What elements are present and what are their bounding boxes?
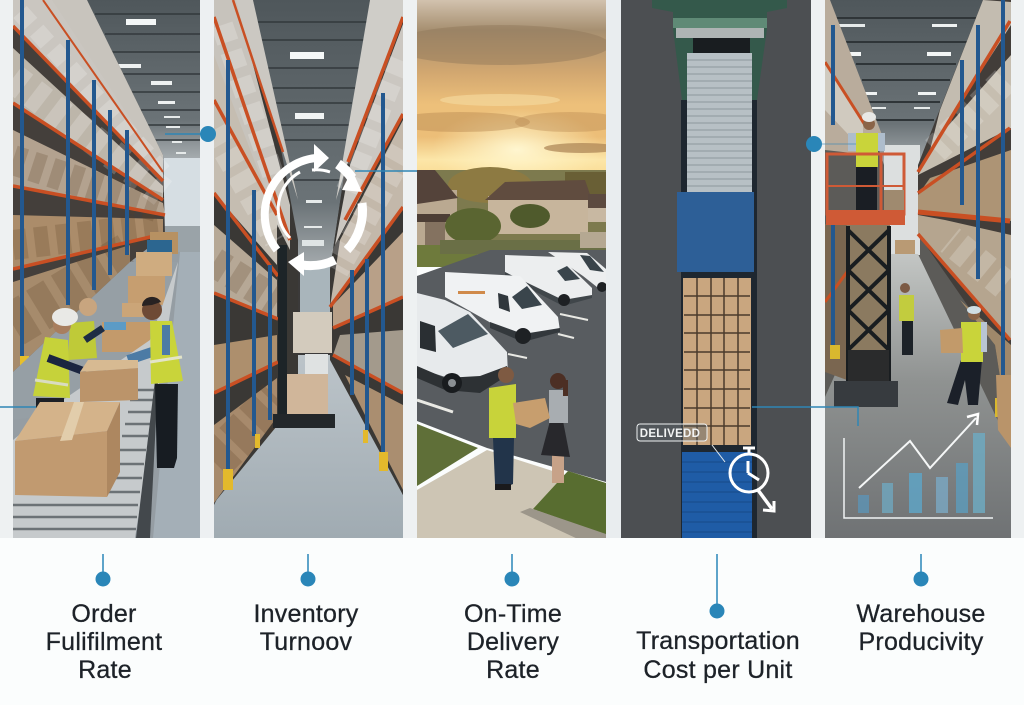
- back wall: [884, 145, 920, 255]
- label: inventory turnover: Inventory: [253, 600, 359, 628]
- label: order fulfilment rate: Rate: [78, 656, 132, 684]
- worker right: [128, 297, 183, 468]
- chassis rails: [681, 100, 757, 538]
- lawn right: [533, 471, 606, 535]
- scissor lift: [826, 112, 905, 407]
- panel: order fulfilment warehouse photo: [13, 0, 200, 538]
- near worker with box: [940, 306, 987, 405]
- blue container: [677, 192, 754, 272]
- label: order fulfilment rate: Fulifilment: [46, 628, 162, 656]
- conveyor: [13, 262, 178, 538]
- label: order fulfilment rate: Order: [71, 600, 137, 628]
- far worker: [899, 283, 914, 355]
- ceiling: [830, 0, 983, 165]
- medium cardboard box: [80, 360, 138, 402]
- panel: on-time delivery photo: [417, 0, 606, 538]
- label: warehouse productivity: Producivity: [858, 628, 984, 656]
- label: order fulfilment rate: [46, 554, 162, 684]
- left racks: [214, 0, 298, 503]
- label: on-time delivery rate: Rate: [486, 656, 540, 684]
- aisle floor: [13, 262, 136, 374]
- boxes on conveyor: [102, 232, 178, 352]
- left racks: [13, 0, 165, 374]
- white container: [687, 53, 752, 192]
- label: transportation cost per unit: Transportation: [636, 627, 800, 655]
- van front: [417, 293, 508, 393]
- label: transportation cost per unit: Cost per Unit: [643, 656, 793, 684]
- callout: delivered tag: DELIVEDD: [640, 428, 700, 440]
- label: on-time delivery rate: Delivery: [467, 628, 559, 656]
- van third: [505, 255, 592, 306]
- courier with parcel: [489, 367, 516, 490]
- back ramp: [300, 267, 330, 312]
- bar chart overlay: [844, 414, 993, 518]
- van far: [548, 252, 607, 292]
- parcel: [513, 398, 550, 428]
- floor: [214, 355, 403, 538]
- lawn left: [417, 424, 478, 486]
- panel: transportation top-down photo: [621, 0, 811, 538]
- worker left: [33, 308, 86, 416]
- right racks: [330, 0, 403, 495]
- large cardboard box: [15, 402, 120, 497]
- label: on-time delivery rate: [464, 554, 562, 684]
- floor: [825, 254, 1011, 538]
- asphalt: [417, 250, 606, 482]
- left rack: [825, 0, 884, 380]
- icon: stopwatch: [730, 447, 774, 511]
- truck cab: [652, 0, 787, 100]
- back wall: [164, 158, 200, 226]
- icon: circular arrows: [265, 144, 363, 276]
- customer: [541, 373, 570, 483]
- callout: delivered tag: [637, 424, 707, 441]
- right rack: [918, 0, 1011, 448]
- sidewalk: [417, 450, 576, 538]
- panel: warehouse productivity photo: [825, 0, 1011, 538]
- ceiling: [253, 0, 370, 270]
- panel: inventory turnover aisle photo: [214, 0, 403, 538]
- blue container bottom: [682, 452, 752, 538]
- connector lines and dots on photos: [0, 126, 858, 426]
- label: transportation cost per unit: [636, 554, 800, 684]
- label: inventory turnover: Turnoov: [260, 628, 353, 656]
- pointer line: [712, 445, 725, 462]
- houses and trees: [417, 167, 606, 267]
- van second: [445, 272, 560, 344]
- label: warehouse productivity: Warehouse: [856, 600, 986, 628]
- label: on-time delivery rate: On-Time: [464, 600, 562, 628]
- sky with clouds: [417, 0, 606, 170]
- label: inventory turnover: [253, 554, 359, 656]
- worker back: [68, 298, 103, 360]
- pallet stack and lift: [273, 245, 335, 428]
- ceiling: [87, 0, 200, 160]
- label: warehouse productivity: [856, 554, 986, 656]
- open load of boxes: [683, 278, 751, 445]
